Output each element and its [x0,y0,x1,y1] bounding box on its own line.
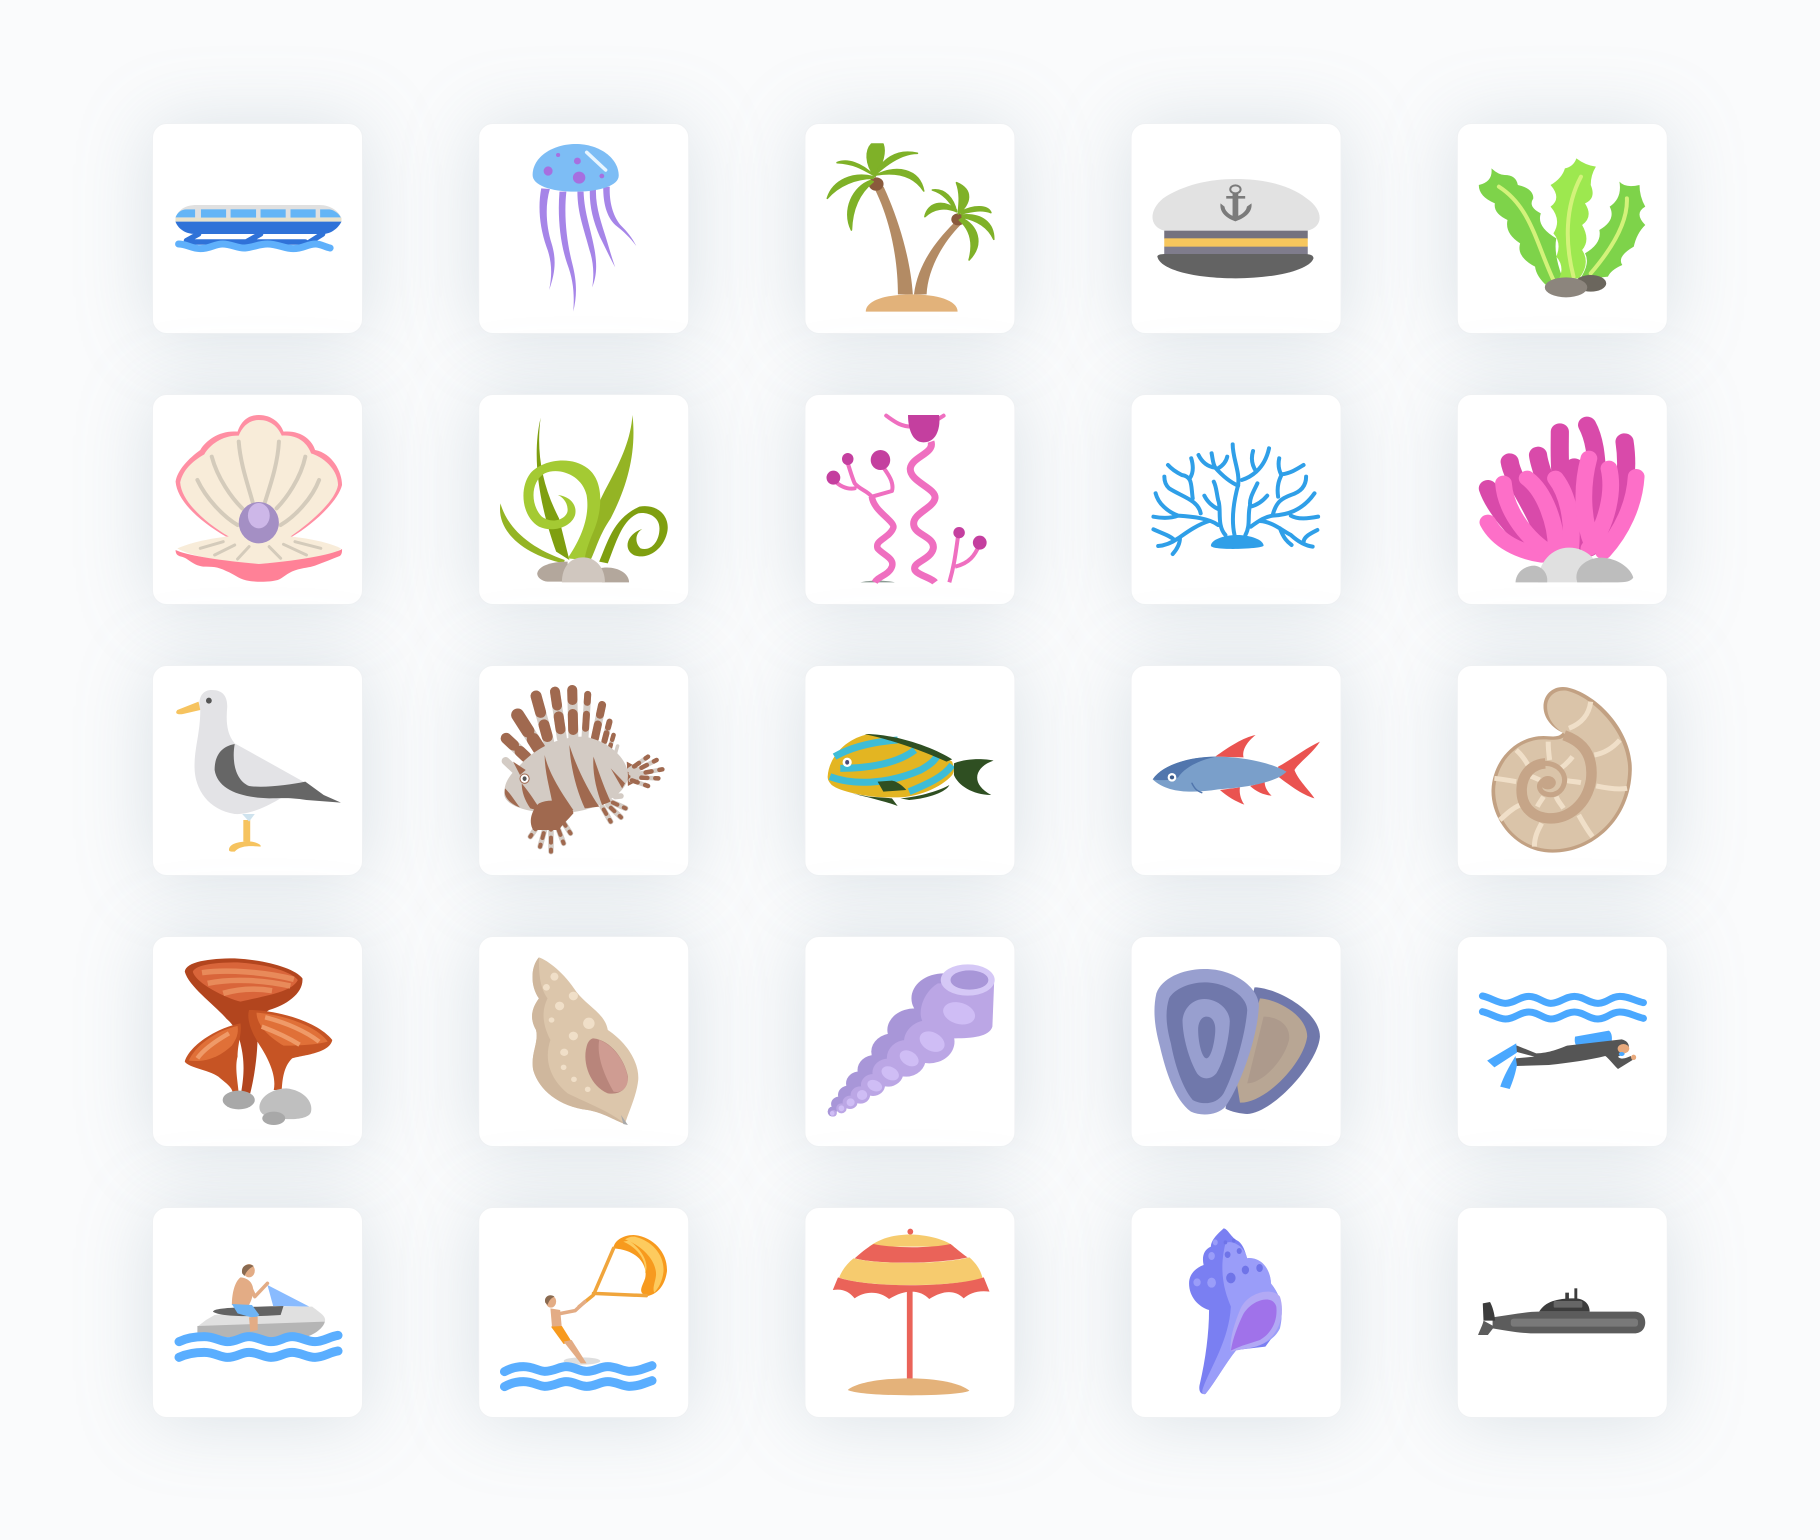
icon: jellyfish [533,144,636,312]
card: captain hat [1131,124,1341,334]
card: boat [152,124,362,334]
card: orange fan coral [152,936,362,1146]
icon: sea grass [500,415,668,582]
icon: jet ski rider [179,1264,338,1357]
icon: lionfish [504,690,662,852]
icon: blue fish with red fins [1153,735,1320,805]
icon: nautilus shell [1491,687,1632,853]
card: submarine [1457,1208,1667,1418]
card: green seaweed [1457,124,1667,334]
card: pearl shell [152,394,362,604]
card: blue coral [1131,394,1341,604]
card: pink anemone [1457,394,1667,604]
card: palm trees [805,124,1015,334]
icon: purple turret shell [828,964,995,1117]
card: nautilus [1457,666,1667,876]
icon: hydrofoil boat [175,205,341,249]
icon: purple conch [1189,1228,1282,1394]
card: lionfish [479,666,689,876]
icon: submarine [1478,1288,1645,1335]
card: turret shell [805,936,1015,1146]
card: jet ski [152,1208,362,1418]
card: scuba diver [1457,936,1667,1146]
card: seagull [152,666,362,876]
icon: pink coral stems [827,415,987,582]
card: conch [1131,1208,1341,1418]
card: jellyfish [479,124,689,334]
icon: pearl clam [176,415,342,582]
icon: beach umbrella [833,1229,990,1395]
icon: whelk shell [532,957,638,1125]
icon: scuba diver [1482,996,1643,1089]
icon: kite surfer [504,1235,667,1387]
icon: palm trees [827,144,994,312]
card: oyster [1131,936,1341,1146]
icon: captain hat [1152,179,1320,278]
icon: pink anemone [1488,425,1636,582]
card: pink coral stems [805,394,1015,604]
card: kite surfer [479,1208,689,1418]
card: blue fish [1131,666,1341,876]
icon: striped tropical fish [828,734,994,806]
icon: orange fan coral [185,958,332,1125]
icon: seagull [176,690,341,852]
icon: oyster [1154,969,1320,1114]
card: beach umbrella [805,1208,1015,1418]
icon: green seaweed [1479,158,1645,297]
card: whelk shell [479,936,689,1146]
icon: blue coral [1153,444,1318,554]
card: sea grass [479,394,689,604]
card: striped fish [805,666,1015,876]
